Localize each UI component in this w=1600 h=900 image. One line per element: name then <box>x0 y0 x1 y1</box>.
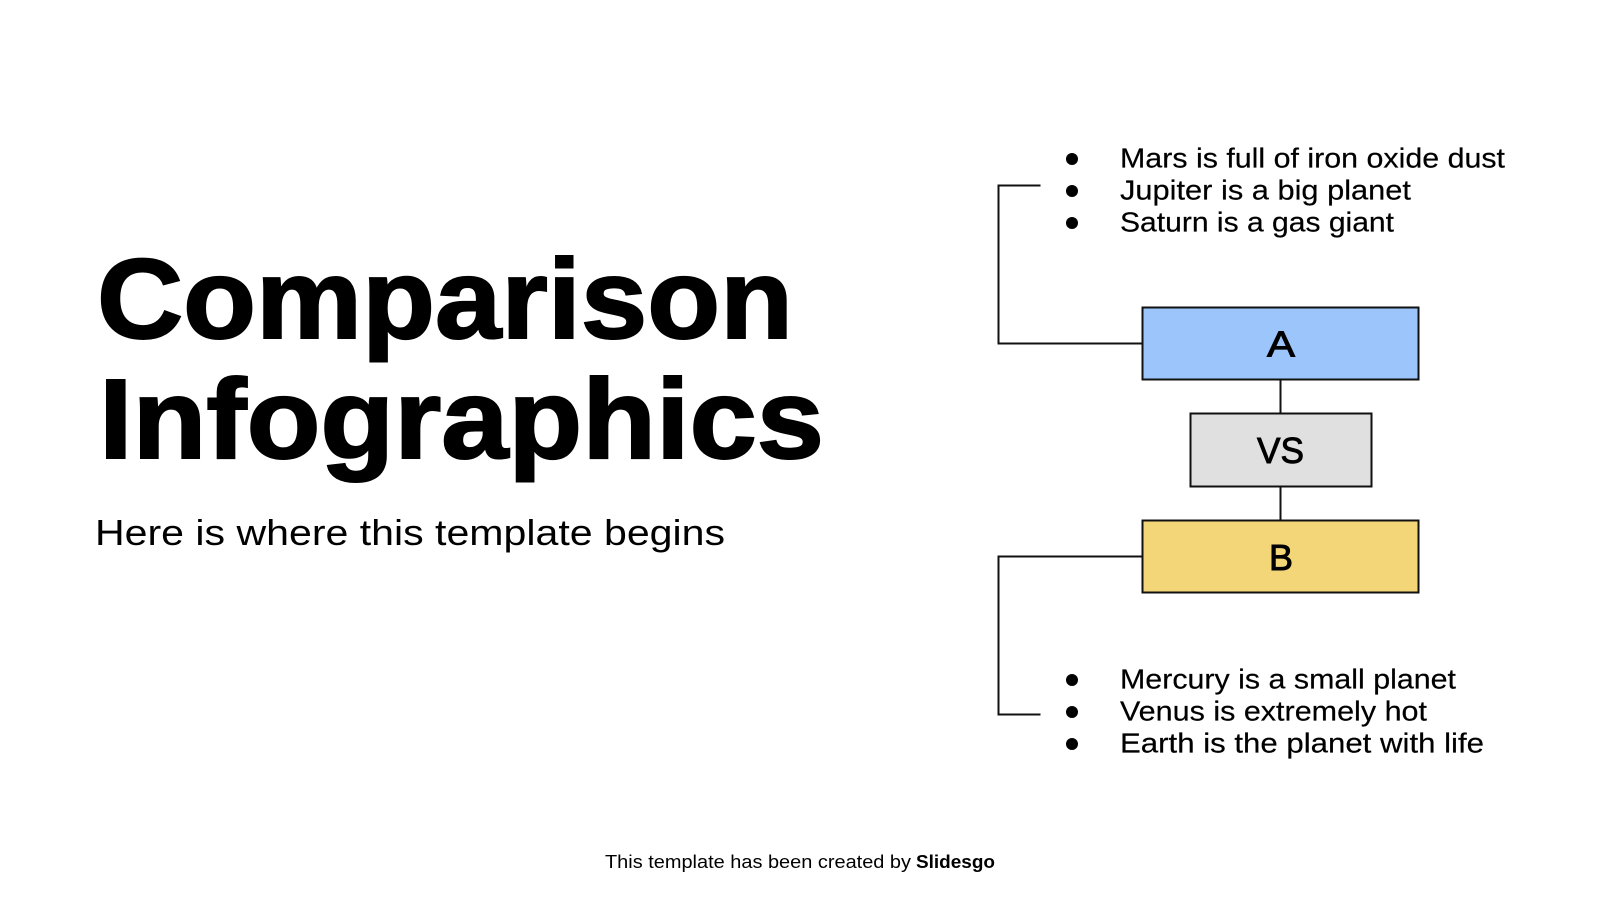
footer credit: Slidesgo <box>916 852 995 872</box>
footer credit: This template has been created by <box>605 852 911 872</box>
connector: VS to B <box>1280 486 1282 520</box>
bracket: A to top list <box>998 186 1142 344</box>
subtitle: Here is where this template begins <box>95 512 725 553</box>
list: option A points: Mars is full of iron oxide dust <box>1120 142 1505 174</box>
box: VS: VS <box>1257 430 1304 471</box>
box: VS <box>1190 414 1372 486</box>
box: A <box>1142 308 1418 380</box>
title: Infographics <box>99 356 824 482</box>
box: B: B <box>1269 537 1293 578</box>
bracket: B to bottom list <box>998 556 1142 714</box>
title <box>97 236 824 482</box>
box: B <box>1142 520 1418 592</box>
list: option A points: Jupiter is a big planet <box>1120 174 1411 206</box>
list: option B points: Venus is extremely hot <box>1120 696 1427 726</box>
box: A: A <box>1267 324 1295 364</box>
list: option B points: Mercury is a small planet <box>1120 664 1456 694</box>
list: option A points: Saturn is a gas giant <box>1120 206 1394 238</box>
title: Comparison <box>97 236 793 362</box>
list: option B points: Earth is the planet with life <box>1120 728 1484 758</box>
list: option A points <box>1066 142 1505 238</box>
list: option B points <box>1066 664 1484 758</box>
connector: A to VS <box>1280 380 1282 413</box>
